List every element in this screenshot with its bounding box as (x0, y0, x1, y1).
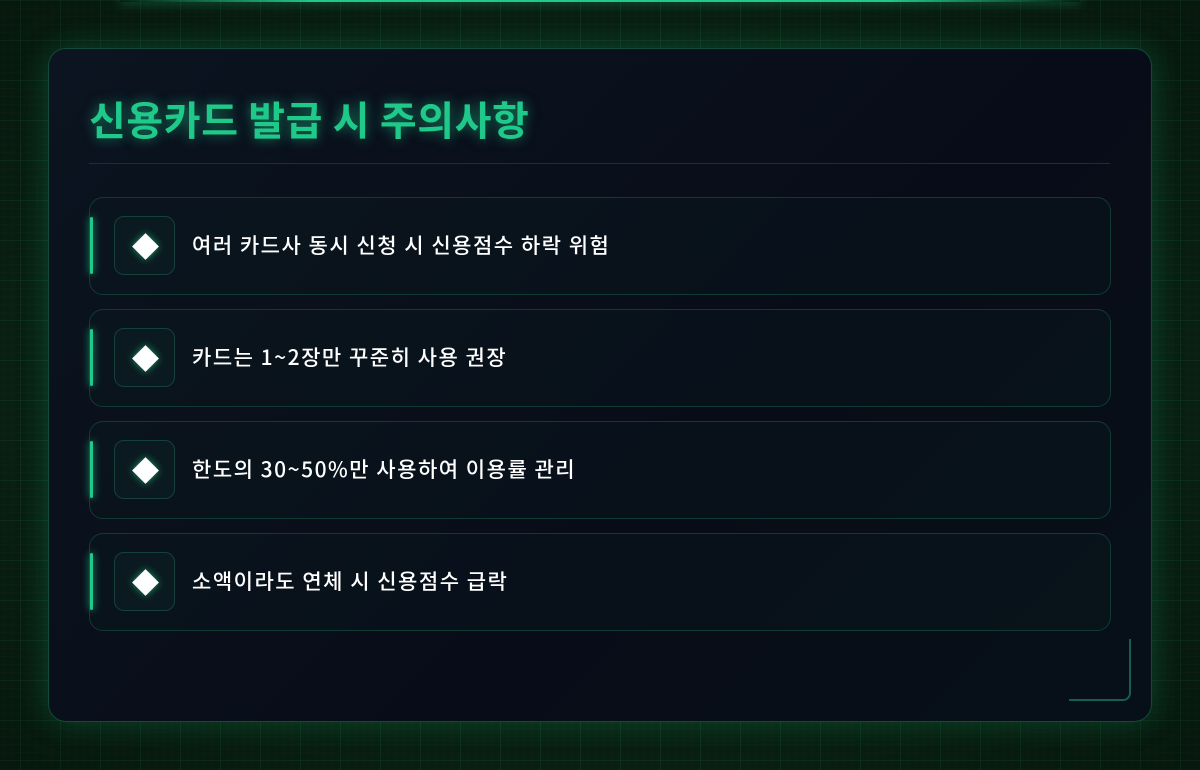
item 4 (89, 533, 1111, 631)
text 1: 여러 카드사 동시 신청 시 신용점수 하락 위험 (192, 230, 610, 260)
corner accent (1069, 639, 1131, 701)
text 3: 한도의 30~50%만 사용하여 이용률 관리 (192, 454, 576, 484)
text 4: 소액이라도 연체 시 신용점수 급락 (192, 566, 508, 596)
text 2: 카드는 1~2장만 꾸준히 사용 권장 (192, 342, 507, 372)
item 2 (89, 309, 1111, 407)
icon: diamond (114, 552, 175, 611)
icon: diamond (114, 328, 175, 387)
item 3 (89, 421, 1111, 519)
item 1 (89, 197, 1111, 295)
title: 신용카드 발급 시 주의사항 (89, 89, 529, 147)
icon: diamond (114, 216, 175, 275)
icon: diamond (114, 440, 175, 499)
